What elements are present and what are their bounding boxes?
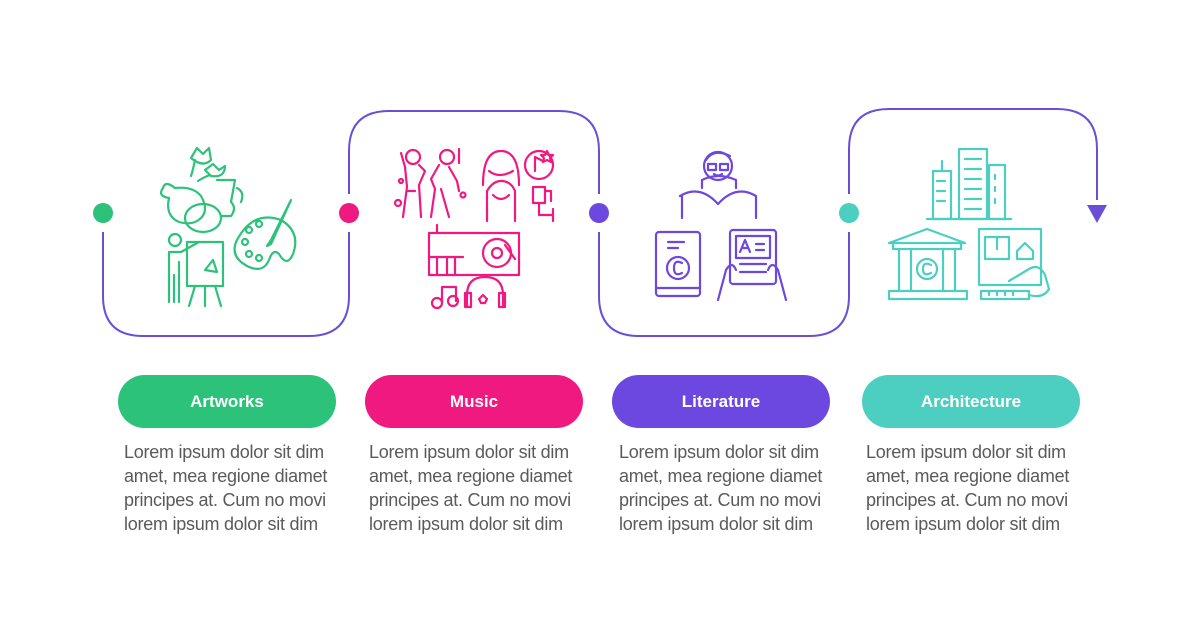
pill: Music xyxy=(365,375,583,428)
text: literature: principes at. Cum no movi xyxy=(619,490,821,510)
text: literature: amet, mea regione diamet xyxy=(619,466,822,486)
text: architecture: principes at. Cum no movi xyxy=(866,490,1068,510)
text: artworks: principes at. Cum no movi xyxy=(124,490,326,510)
pill: Literature xyxy=(612,375,830,428)
text: music xyxy=(369,442,572,534)
icon: music xyxy=(394,148,554,310)
icon: literature xyxy=(654,150,788,302)
text: architecture xyxy=(866,442,1070,534)
text: music: Lorem ipsum dolor sit dim xyxy=(369,442,569,462)
text: literature: lorem ipsum dolor sit dim xyxy=(619,514,813,534)
text: music: lorem ipsum dolor sit dim xyxy=(369,514,563,534)
text: architecture: amet, mea regione diamet xyxy=(866,466,1069,486)
text: artworks xyxy=(124,442,328,534)
text: literature xyxy=(619,442,822,534)
text: architecture: lorem ipsum dolor sit dim xyxy=(866,514,1060,534)
text: artworks: amet, mea regione diamet xyxy=(124,466,327,486)
pill: Artworks: Artworks xyxy=(190,392,264,411)
icon: architecture xyxy=(888,148,1050,300)
text: artworks: lorem ipsum dolor sit dim xyxy=(124,514,318,534)
text: literature: Lorem ipsum dolor sit dim xyxy=(619,442,819,462)
text: music: amet, mea regione diamet xyxy=(369,466,572,486)
pill: Music: Music xyxy=(450,392,498,411)
pill: Architecture xyxy=(862,375,1080,428)
pill: Artworks xyxy=(118,375,336,428)
pill: Architecture: Architecture xyxy=(921,392,1021,411)
text: artworks: Lorem ipsum dolor sit dim xyxy=(124,442,324,462)
pill: Literature: Literature xyxy=(682,392,760,411)
text: music: principes at. Cum no movi xyxy=(369,490,571,510)
text: architecture: Lorem ipsum dolor sit dim xyxy=(866,442,1066,462)
icon: artworks xyxy=(160,146,296,308)
arrow xyxy=(1087,205,1107,223)
